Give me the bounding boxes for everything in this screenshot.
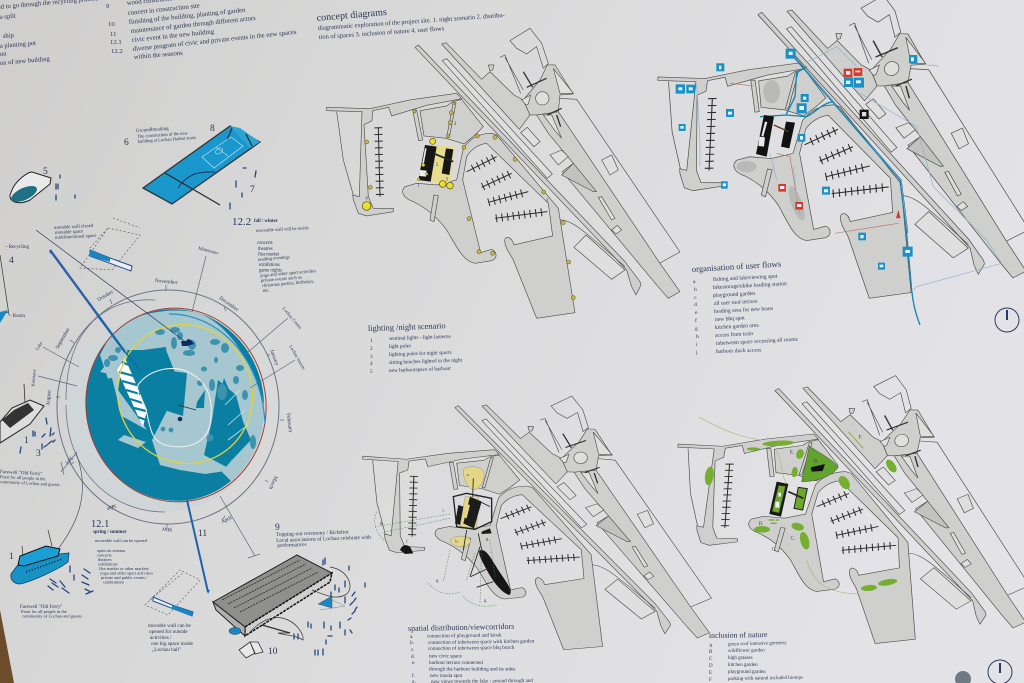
- text: spring summer: moveable wall can be opened: [95, 538, 148, 543]
- text: topping-out: Topping-out ceremony / Richtfest: [276, 528, 349, 538]
- heading: concept diagrams: tion of spaces 3. inclusion of nature 4. user flows: [319, 25, 445, 41]
- list: spatial distribution: new insula spot: [430, 673, 463, 679]
- heading: inclusion of nature: inclusion of nature: [709, 630, 768, 640]
- people around ferry: [48, 566, 93, 594]
- text block: process steps numbered: 11: [110, 31, 116, 38]
- heading: spatial distribution: spatial distribution/viewcorridors: [408, 622, 514, 633]
- list: user flows: h: [696, 334, 699, 340]
- text block: process steps left column: [0, 0, 99, 67]
- list: inclusion of nature: playground garden: [728, 670, 766, 675]
- text: movable wall open: opened for outside: [149, 628, 188, 635]
- list: spatial distribution: c.: [411, 647, 415, 653]
- movable wall open diagram: [145, 570, 200, 616]
- recycling room diagram: – Room: [8, 314, 25, 319]
- spatial overlay: b.: [455, 539, 459, 544]
- text: spring summer: concerts: [97, 552, 112, 558]
- spoke labels: Konstanz: [30, 369, 37, 387]
- step numbers: 6: [124, 138, 129, 148]
- text: farewell upper: Feast for all people in the: [0, 474, 46, 481]
- list: user flows: access from train: [715, 330, 753, 339]
- list: inclusion of nature: wildflower garden: [728, 648, 765, 654]
- list: lighting: 5: [370, 369, 373, 375]
- text: movable wall open: „Lochau hall": [152, 647, 181, 653]
- text block: process steps numbered: 10: [108, 21, 115, 28]
- text block: process steps numbered: 9: [106, 3, 110, 10]
- text block: process steps numbered: 12.2: [111, 48, 123, 55]
- list: winter activities: private events such as: [261, 275, 302, 284]
- text: movable wall open: movable wall can be: [148, 623, 191, 629]
- calendar rings: [57, 290, 279, 524]
- lines crossing globe: [36, 230, 210, 594]
- tree clumps: [104, 327, 256, 449]
- lighting overlay: 5: [436, 163, 439, 168]
- list: lighting: light poles: [389, 343, 411, 350]
- text: spring summer: celebrations: [103, 580, 125, 584]
- list: user flows: all user roof terrace: [714, 298, 758, 307]
- step numbers: 9: [275, 523, 280, 533]
- list: inclusion of nature: F: [709, 678, 712, 683]
- text block: process steps numbered: diverse program of civic and private events in the new spaces: [132, 29, 297, 53]
- text block: process steps left column: ship: [3, 32, 15, 40]
- list: winter activities: [257, 241, 317, 294]
- ship icon old ferry: [0, 384, 55, 453]
- text: spring summer: private and public events /: [101, 575, 148, 580]
- month labels: June: [105, 502, 117, 512]
- text block: process steps numbered: 12.1: [110, 39, 122, 46]
- list: spatial distribution: d.: [411, 654, 415, 660]
- wall closed caption: movable space: [55, 230, 83, 236]
- outline arcs: [73, 296, 279, 514]
- step numbers: 10: [268, 647, 278, 657]
- step numbers: 8: [210, 124, 215, 134]
- icon: north clock top: [995, 308, 1019, 332]
- list: user flows: d: [694, 302, 697, 308]
- list: spatial distribution: harbour terrace connected: [429, 660, 483, 666]
- list: spatial distribution: a.: [410, 634, 414, 640]
- list: winter activities: etc.: [263, 289, 270, 294]
- list: user flows: e: [695, 310, 698, 316]
- list: user flows: g: [695, 326, 698, 332]
- site plan 3: [352, 387, 723, 656]
- court: groundbreaking: [143, 126, 260, 205]
- list: user flows: inbetween space accessing all rooms: [716, 337, 798, 347]
- month labels: July: [64, 455, 74, 466]
- month labels: [45, 278, 293, 532]
- list: winter activities: concerts: [257, 241, 273, 246]
- list: spatial distribution: connection of inbetween space with kitchen garden: [428, 638, 535, 646]
- ring tick marks and spokes: [38, 256, 295, 558]
- list: spatial distribution: b.: [410, 640, 414, 646]
- list: user flows: [693, 273, 798, 356]
- panel: user flows plan: [642, 0, 1024, 356]
- list: user flows: a: [693, 279, 696, 285]
- step numbers: 1: [24, 436, 29, 446]
- icon: north clock bottom: [988, 660, 1012, 683]
- table corner behind poster: [0, 610, 14, 683]
- wall closed caption: multifunctional space: [55, 234, 96, 241]
- text: farewell upper: Farewell "Old Ferry": [0, 470, 43, 477]
- pin: [955, 671, 971, 683]
- panel: inclusion of nature plan: [658, 371, 1024, 683]
- text: spring summer: 12.1: [91, 519, 109, 530]
- list: user flows: loading area for new boats: [714, 305, 773, 315]
- text: farewell lower: [20, 605, 82, 618]
- step numbers: 5: [43, 167, 48, 177]
- panel: seasonal globe with calendar ring: [30, 230, 307, 594]
- month labels: October: [96, 289, 115, 303]
- text: farewell upper: community of Lochau and guests: [0, 479, 60, 487]
- lighting overlay: 4: [365, 196, 368, 201]
- list: lighting: 2: [370, 346, 373, 352]
- lighting overlay: 2: [546, 199, 549, 204]
- heading: user flows: organisation of user flows: [692, 259, 782, 274]
- list: lighting: 4: [370, 361, 373, 367]
- spatial overlay: f.: [406, 539, 409, 544]
- spatial overlay: [375, 467, 511, 606]
- step numbers: 11: [198, 529, 207, 539]
- text: farewell lower: Feast for all people in the: [21, 609, 67, 614]
- list: inclusion of nature: kitchen garden: [728, 663, 758, 668]
- text: topping-out: [276, 528, 371, 549]
- list: spatial distribution: new civic space: [429, 654, 463, 660]
- spoke labels: Lochau Center: [282, 306, 303, 330]
- text: topping-out: performances: [277, 541, 307, 549]
- fall winter heading: [232, 216, 309, 233]
- spatial overlay: g.: [484, 598, 487, 603]
- yellow ring: [116, 324, 254, 464]
- heading: lighting: lighting /night scenario: [368, 321, 446, 333]
- text block: process steps left column: a split: [0, 13, 16, 21]
- list: lighting: new harbourspace of harbour: [389, 365, 451, 374]
- list: spatial distribution: connection of inbetween space bbq beach: [428, 644, 515, 652]
- list: lighting: 3: [370, 354, 373, 360]
- text: groundbreaking: The construction of the new: [137, 130, 189, 139]
- step numbers: 1: [9, 552, 14, 562]
- list: lighting: sitting benches lighted in the night: [389, 357, 463, 366]
- nature overlay: G.: [772, 547, 776, 552]
- spoke labels: Mittelmeer: [198, 245, 219, 256]
- text: spring summer: spring / summer: [93, 530, 127, 535]
- list: inclusion of nature: B: [709, 650, 713, 655]
- text block: process steps numbered: civic event in the new building: [131, 28, 215, 44]
- text: spring summer: open air cinema: [97, 548, 125, 553]
- list: inclusion of nature: D: [709, 664, 713, 669]
- list: inclusion of nature: C: [709, 657, 713, 662]
- land area: [100, 311, 268, 482]
- crowd around building: [294, 558, 365, 655]
- list: inclusion of nature: [709, 641, 803, 683]
- text block: process steps numbered: concert in construction site: [127, 2, 200, 17]
- list: user flows: harbour dock access: [716, 347, 761, 355]
- text block: process steps numbered: maintenance of garden through different actors: [130, 15, 257, 35]
- list: user flows: fishing and lakeviewing spot: [713, 273, 778, 283]
- text: spring summer: [91, 519, 153, 584]
- icon: blue ferry: [11, 530, 69, 584]
- list: user flows: playground garden: [713, 291, 755, 299]
- movable wall closed diagram: [80, 218, 140, 271]
- list: winter activities: reading evenings: [258, 255, 290, 263]
- list: winter activities: yoga and other sport activities: [260, 269, 317, 279]
- list: lighting: lighting poles for night sports: [389, 349, 452, 358]
- list: user flows: bikestorage/ebike loading station: [713, 281, 787, 291]
- people group near court: [56, 168, 256, 209]
- nature overlay: C.: [791, 536, 795, 541]
- white route ring: [138, 368, 211, 447]
- nature overlay: D.: [759, 522, 763, 527]
- hatch area: [117, 358, 147, 427]
- list: winter activities: game nights: [259, 268, 282, 274]
- text: movable wall open: [148, 623, 194, 653]
- panel: spatial distribution plan: [352, 387, 723, 683]
- boat 5: [9, 172, 51, 205]
- text block: process steps numbered: within the seasons: [134, 50, 183, 61]
- spatial overlay: g.: [380, 520, 383, 525]
- list: user flows: j: [695, 350, 698, 356]
- spatial overlay: g.: [436, 578, 439, 583]
- list: lighting: sentinal lights - light lanterns: [389, 334, 451, 342]
- list: inclusion of nature: green roof intensive greenery: [728, 641, 787, 647]
- list: spatial distribution: f.: [412, 672, 415, 679]
- list: inclusion of nature: parking with natural included biotops: [728, 676, 803, 682]
- text block: process steps left column: a planting pot: [0, 40, 36, 50]
- fall winter heading: 12.2: [232, 216, 251, 228]
- recycling room diagram: – Recycling: [4, 245, 30, 250]
- spoke labels: Lochau Seeum: [288, 344, 307, 371]
- month labels: November: [154, 278, 178, 286]
- lighting overlay: [362, 102, 575, 300]
- list: winter activities: theatres: [258, 247, 273, 252]
- list: user flows: i: [696, 342, 698, 348]
- text block: process steps left column: on of new building: [0, 56, 51, 67]
- text: groundbreaking: building at Lochau Harbor starts: [137, 135, 196, 144]
- wall closed caption: movable wall closed: [54, 224, 94, 231]
- recycling room diagram: [0, 245, 30, 323]
- text: spring summer: flea market or other markets: [99, 566, 149, 571]
- month labels: January: [268, 349, 280, 367]
- text: spring summer: theatres: [98, 557, 112, 562]
- list: spatial distribution: connection of playground and kiosk: [427, 631, 502, 639]
- spoke labels: [30, 245, 307, 387]
- text: farewell upper: [0, 470, 60, 487]
- curve to ship: [58, 453, 82, 549]
- list: user flows: c: [694, 295, 697, 301]
- user flow overlay: [676, 47, 1002, 325]
- list: user flows: kitchen garden area: [715, 323, 759, 331]
- spatial overlay: c.: [442, 508, 445, 513]
- wall closed caption: [54, 224, 96, 241]
- list: user flows: b: [694, 287, 697, 293]
- list: spatial distribution: e.: [412, 660, 416, 666]
- globe: [85, 308, 267, 502]
- list: inclusion of nature: high grasses: [728, 656, 753, 661]
- list: user flows: new bbq spot: [715, 315, 745, 323]
- list: spatial distribution: [410, 631, 535, 683]
- heading: concept diagrams: [316, 7, 505, 41]
- text block: process steps numbered: finishing of the building, planting of garden: [128, 7, 246, 26]
- spatial overlay: a.: [467, 472, 470, 477]
- fall winter heading: fall / winter: [254, 219, 279, 224]
- list: winter activities: christmas parties, birthdays,: [262, 279, 315, 289]
- nature overlay: E.: [790, 450, 794, 455]
- step numbers: 4: [9, 256, 14, 266]
- text: groundbreaking: [136, 125, 196, 144]
- lighting overlay: 2: [454, 122, 457, 127]
- text: groundbreaking: Groundbreaking: [136, 127, 169, 134]
- list: lighting: 1: [370, 338, 373, 344]
- step numbers: 7: [250, 185, 255, 195]
- month labels: May: [162, 526, 172, 532]
- month labels: September: [55, 327, 72, 350]
- text: spring summer: exhibitions: [98, 562, 118, 566]
- lighting overlay: 1: [417, 184, 420, 189]
- site plan 4: [658, 371, 1024, 647]
- lighting overlay: 3: [446, 178, 449, 183]
- nature overlay: F.: [859, 435, 862, 440]
- list: winter activities: exhibitions: [259, 263, 280, 268]
- text: topping-out: Local associations of Lochau celebrate with: [276, 534, 371, 544]
- list: inclusion of nature: E: [709, 671, 712, 676]
- panel: lighting night scenario plan: [327, 28, 680, 375]
- month labels: August: [45, 389, 53, 406]
- text: movable wall open: activities /: [150, 635, 172, 641]
- nature overlay: B.: [814, 460, 818, 465]
- fall winter heading: moveable wall will be inside: [256, 225, 309, 233]
- site plan 2: [642, 0, 1024, 299]
- list: inclusion of nature: A: [709, 644, 713, 649]
- site plan 1: [327, 28, 680, 318]
- month labels: March: [267, 475, 279, 490]
- list: winter activities: flea market: [258, 252, 280, 258]
- nature overlay: [699, 417, 899, 594]
- icon: small boat on globe: [181, 339, 194, 346]
- month labels: February: [285, 413, 293, 433]
- step numbers: 3: [36, 449, 41, 459]
- month labels: April: [220, 515, 233, 525]
- step numbers: [9, 124, 280, 657]
- heading: concept diagrams: concept diagrams: [316, 7, 387, 24]
- icon: isometric building: [213, 555, 350, 658]
- spatial overlay: g.: [486, 536, 489, 541]
- list: lighting: [370, 334, 463, 375]
- text: farewell lower: community of Lochau and guests: [22, 614, 82, 618]
- list: spatial distribution: through the harbour building and its sides: [429, 666, 515, 672]
- list: user flows: f: [695, 317, 697, 324]
- text: spring summer: yoga and other sport activities: [100, 570, 153, 576]
- text: movable wall open: one big space inside: [151, 641, 194, 647]
- text block: process steps numbered: [106, 0, 297, 61]
- heading: concept diagrams: diagrammatic exploration of the project site. 1. night scenario 2. distribu-: [318, 12, 505, 32]
- spoke labels: Lake: [34, 341, 43, 351]
- month labels: December: [218, 295, 240, 313]
- text: farewell lower: Farewell "Old Ferry": [20, 605, 62, 610]
